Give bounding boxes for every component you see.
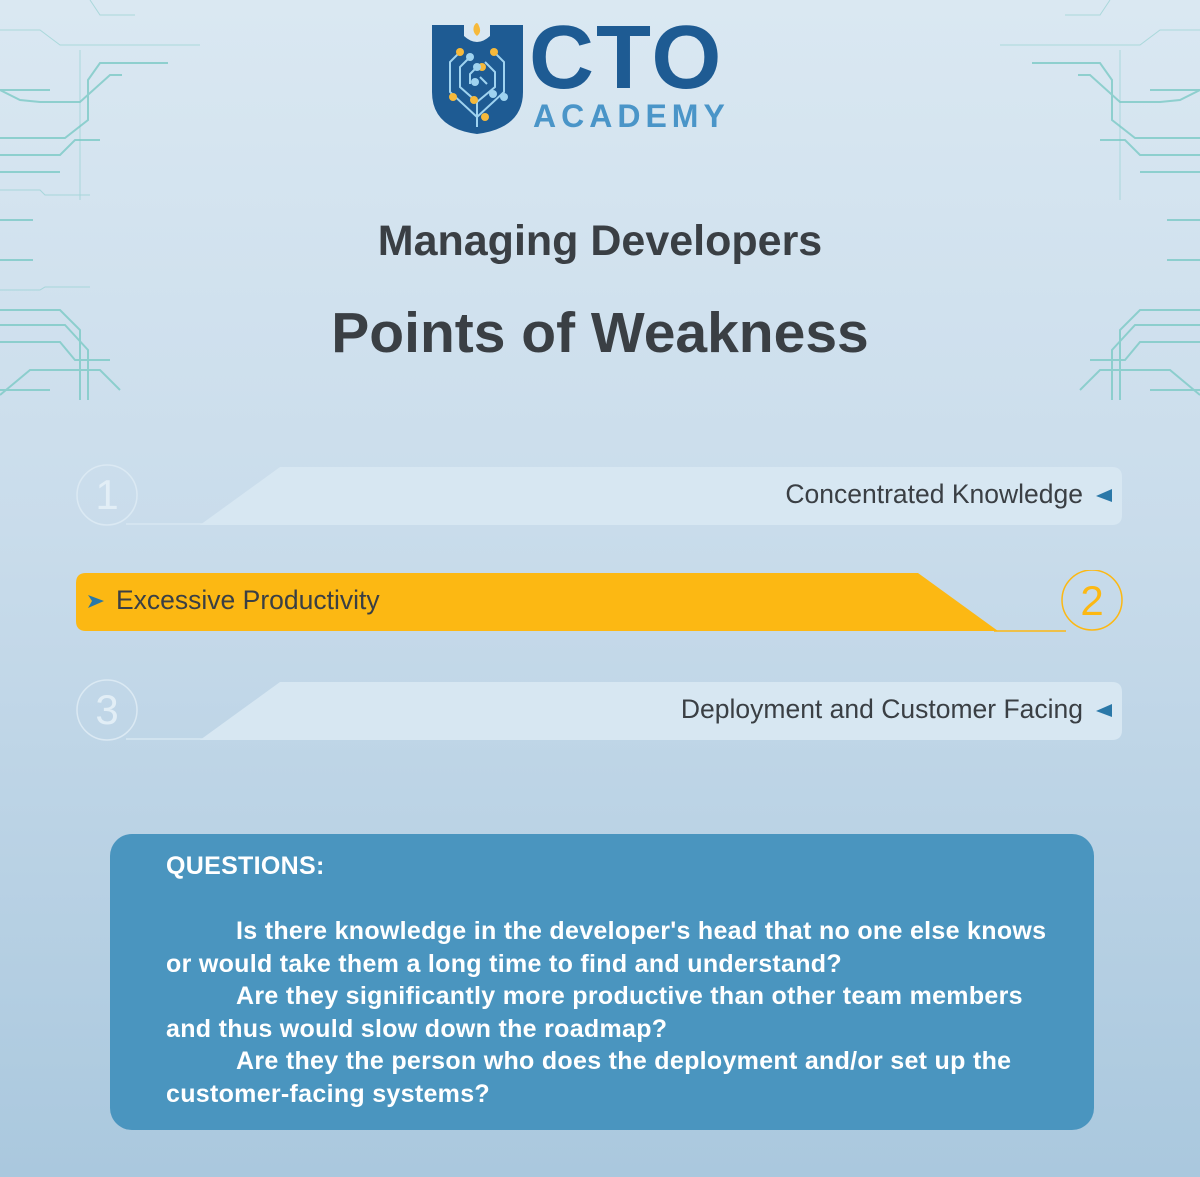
questions box: [110, 834, 1094, 1130]
item 1: Concentrated Knowledge: [785, 479, 1083, 509]
questions box: QUESTIONS:: [166, 852, 325, 880]
item 3: 3: [95, 686, 119, 733]
title: Points of Weakness: [331, 301, 869, 365]
subtitle: Managing Developers: [378, 217, 822, 265]
item 2: [76, 570, 1123, 632]
logo: ACADEMY: [533, 98, 730, 134]
item 3: [76, 679, 1122, 741]
item 3: Deployment and Customer Facing: [681, 694, 1083, 724]
questions box: Are they the person who does the deployment and/or set up the customer-facing systems?: [166, 1047, 1011, 1108]
logo: [432, 8, 730, 134]
logo text: CTO: [529, 8, 723, 108]
icon: shield: [432, 23, 523, 134]
questions box: Are they significantly more productive than other team members and thus would slow down the roadmap?: [166, 982, 1023, 1042]
questions box: Is there knowledge in the developer's head that no one else knows or would take them a long time to find and understand?: [166, 917, 1046, 978]
item 1: [76, 464, 1122, 526]
decorative circuit lines left: [0, 0, 1200, 400]
item 1: 1: [95, 471, 119, 518]
item 2: Excessive Productivity: [116, 585, 380, 615]
item 2: 2: [1080, 577, 1104, 624]
